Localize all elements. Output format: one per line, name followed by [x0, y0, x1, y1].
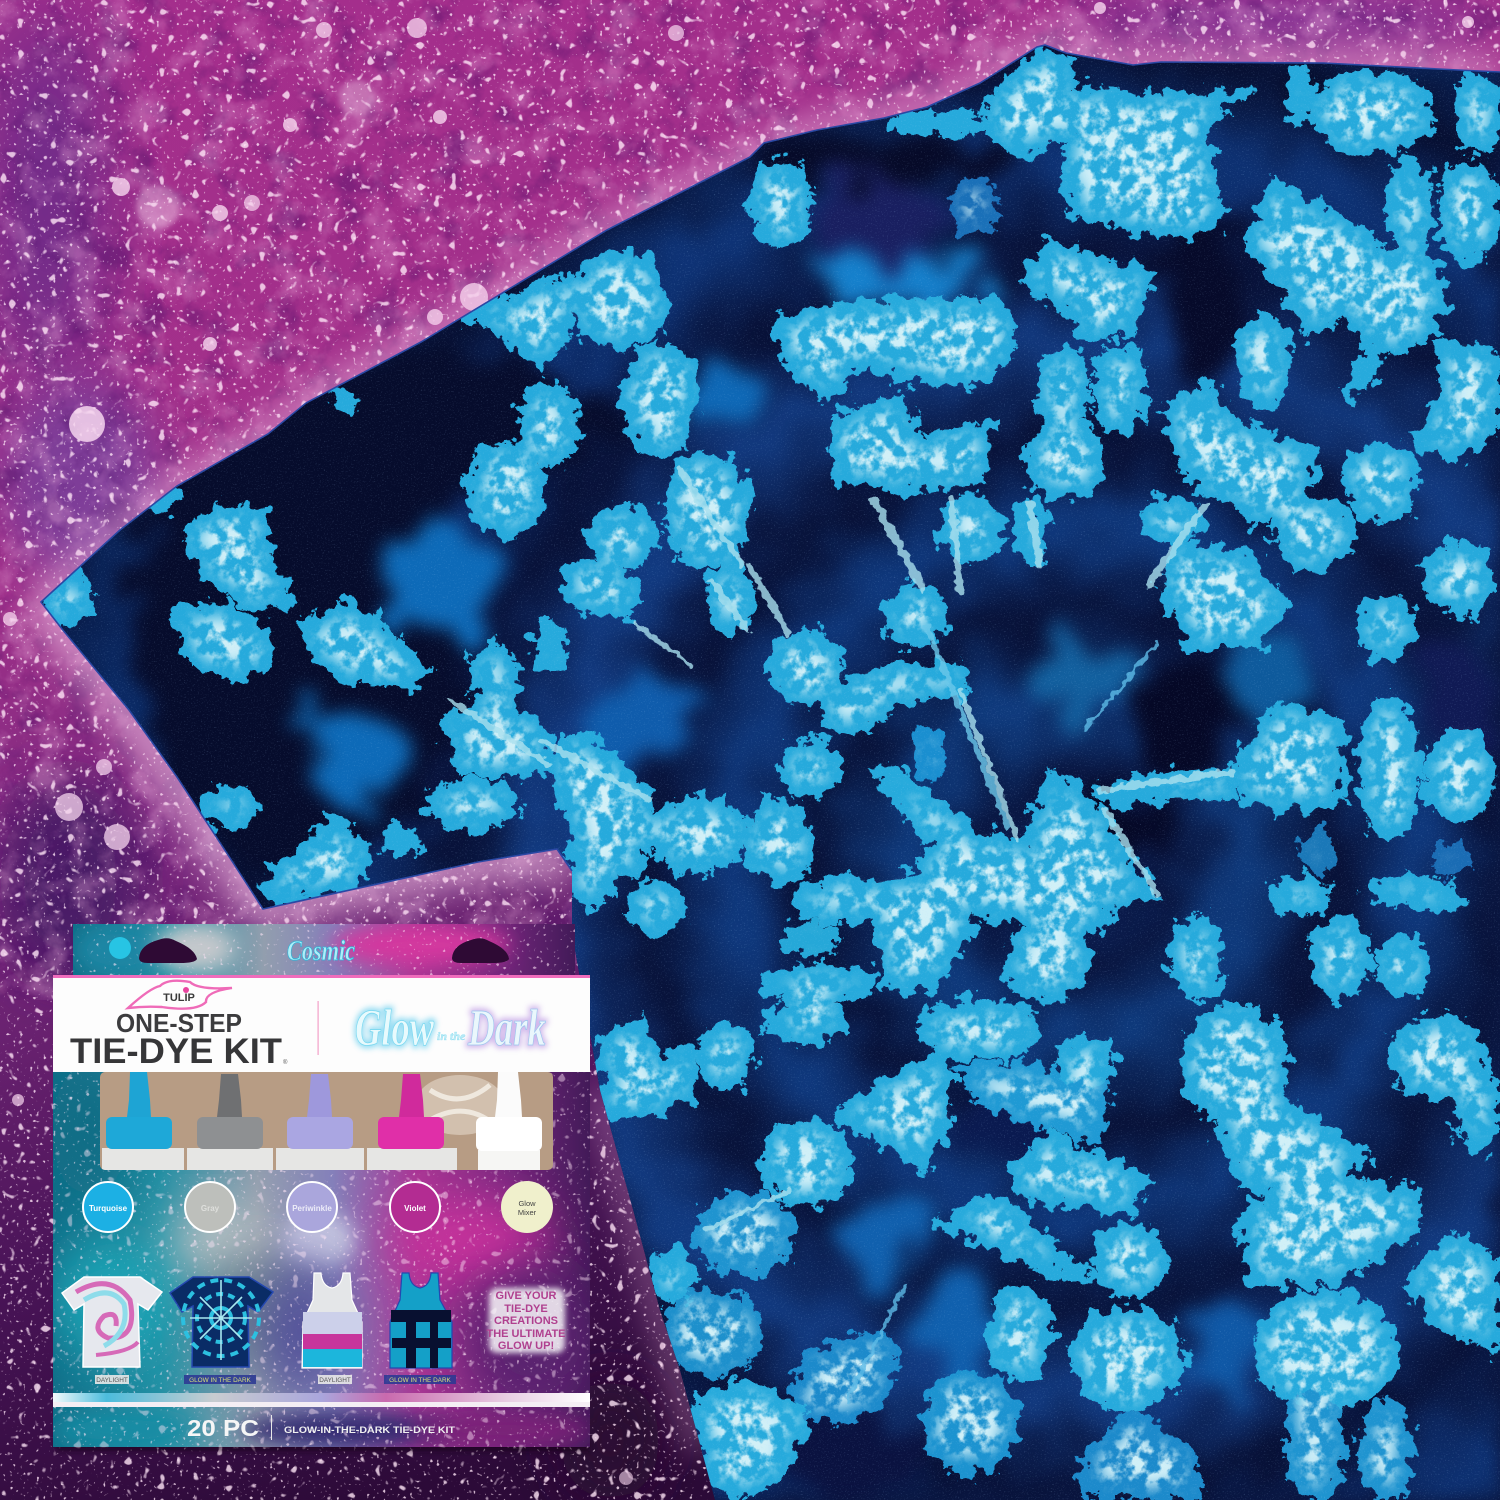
label: daylight 2: DAYLIGHT	[319, 1377, 351, 1384]
swatch: glow mixer: Glow	[518, 1199, 536, 1208]
shirt underlay	[575, 72, 1500, 1500]
swatch: periwinkle	[287, 1182, 337, 1232]
tab label: Cosmic: Cosmic	[287, 935, 355, 967]
header divider	[318, 1001, 319, 1055]
swatch: glow mixer: Mixer	[518, 1208, 537, 1217]
logo: Glow in the Dark: Dark	[467, 1000, 546, 1057]
logo: Glow in the Dark: Glow	[355, 1000, 434, 1057]
icon: glowing star on tab	[109, 937, 131, 959]
label: glow 1: GLOW IN THE DARK	[189, 1377, 252, 1384]
callout: glow up message	[486, 1288, 566, 1353]
sample shirt: glow spiral	[170, 1277, 273, 1367]
white header band	[53, 975, 590, 1072]
product window with bottles	[100, 1072, 553, 1172]
heading: Tie-Dye Kit: TIE-DYE KIT	[70, 1032, 282, 1071]
label: glow 1	[184, 1375, 256, 1384]
bleached streaks radiating from spiral centre	[450, 470, 1233, 1400]
footer divider	[271, 1415, 272, 1440]
bottle: periwinkle	[276, 1074, 364, 1172]
bottle: violet	[367, 1074, 457, 1172]
footer label: GLOW-IN-THE-DARK TIE-DYE KIT	[284, 1425, 456, 1435]
heading: One-Step: ONE-STEP	[116, 1008, 242, 1038]
icon: Tulip logo splash: TULIP	[163, 992, 195, 1004]
registered mark: ®	[283, 1059, 288, 1066]
logo: Glow in the Dark: Glow	[355, 1000, 434, 1057]
bottle: gray	[187, 1074, 273, 1172]
callout: glow up message: GIVE YOUR	[496, 1290, 557, 1302]
hang hole left	[139, 938, 197, 963]
label: glow 2: GLOW IN THE DARK	[389, 1377, 452, 1384]
swatch: violet	[390, 1182, 440, 1232]
sample tank: daylight stripes	[302, 1273, 362, 1368]
swatch: violet: Violet	[404, 1204, 426, 1213]
swatch: turquoise: Turquoise	[89, 1204, 128, 1213]
label: daylight 1: DAYLIGHT	[96, 1377, 128, 1384]
bottle: turquoise	[102, 1072, 184, 1172]
callout: glow up message: THE ULTIMATE	[486, 1328, 566, 1340]
logo: Glow in the Dark: Dark	[467, 1000, 546, 1057]
callout: glow up message: CREATIONS	[494, 1315, 558, 1327]
sample labels	[95, 1375, 456, 1384]
label: glow 2	[384, 1375, 456, 1384]
swatch: gray	[185, 1182, 235, 1232]
hang hole right	[452, 938, 509, 963]
callout: glow up message: GLOW UP!	[498, 1340, 554, 1352]
sample tank: glow pattern	[390, 1273, 452, 1368]
swatch: turquoise	[83, 1182, 133, 1232]
gradient stripe	[53, 1393, 590, 1407]
icon: Tulip logo splash	[128, 981, 232, 1009]
callout: glow up message: TIE-DYE	[504, 1303, 548, 1315]
swatch: gray: Gray	[201, 1204, 220, 1213]
box shadow	[56, 1440, 590, 1451]
swatch: periwinkle: Periwinkle	[292, 1204, 332, 1213]
sample shirt: daylight swirl	[62, 1277, 162, 1367]
product box: Tulip One-Step Tie-Dye Kit	[53, 924, 590, 1451]
bottle: glow mixer	[476, 1072, 542, 1172]
logo: Glow in the Dark: in the	[437, 1029, 466, 1043]
box hanger tab	[73, 924, 575, 978]
colour swatches	[83, 1181, 553, 1233]
piece count: 20 PC: 20 PC	[187, 1415, 259, 1441]
shirt outline rim	[41, 45, 1500, 909]
logo: Glow in the Dark	[355, 1000, 546, 1057]
swatch: glow mixer	[501, 1181, 553, 1233]
box front panel	[53, 975, 590, 1447]
